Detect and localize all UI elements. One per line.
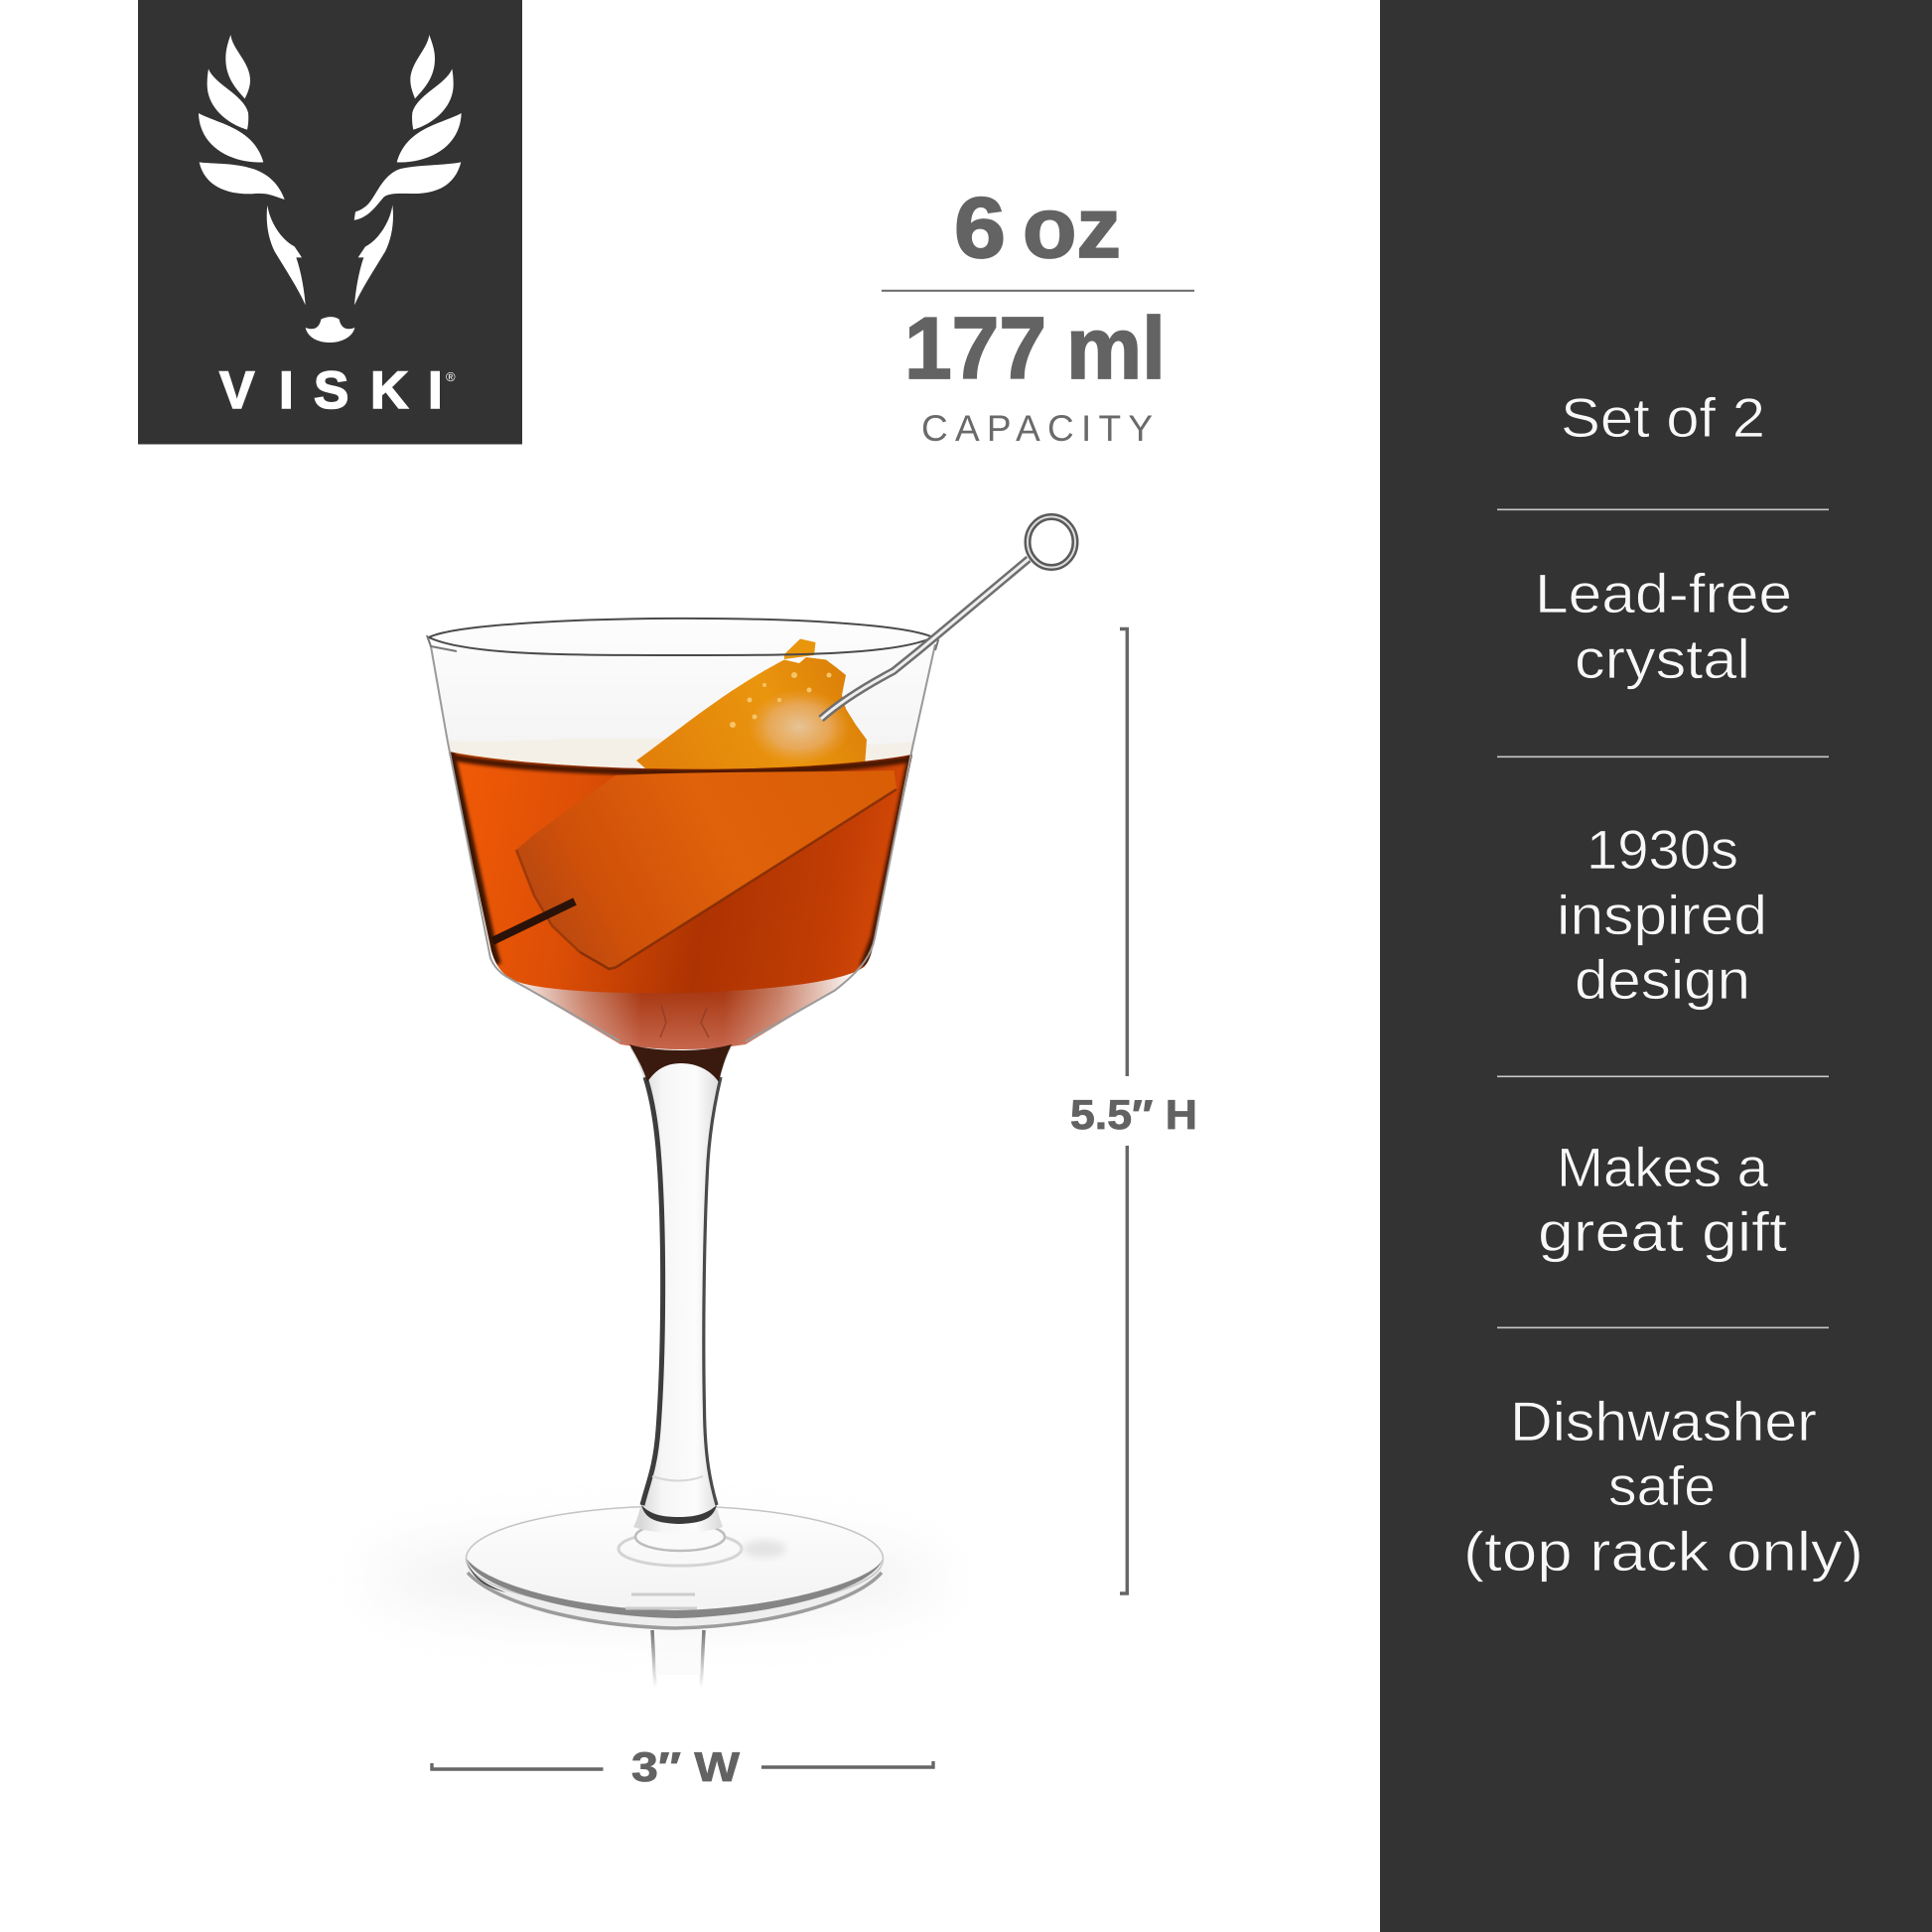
glass bowl outline [427,619,938,1041]
feature: set of 2: Set of 2 [1561,386,1765,449]
lower citrus peel [492,770,897,969]
cocktail pick inside the liquid [492,901,575,941]
capacity in ounces: 6 [954,181,1006,276]
capacity in millilitres: 177 [904,299,1046,397]
stem reflection [652,1630,704,1688]
base shadow [367,1537,943,1620]
feature: dishwasher safe [1463,1390,1863,1583]
feature: 1930s inspired design: design [1575,948,1750,1011]
feature: makes a great gift [1538,1136,1788,1263]
panel: viski logo [138,0,522,445]
upper citrus peel [636,639,867,772]
feature: 1930s inspired design [1557,818,1767,1011]
icon: stag head emblem [199,35,462,343]
meniscus [448,739,912,771]
capacity in ounces: oz [1023,181,1121,276]
liquid: cone below bowl [506,969,860,1049]
cocktail glass illustration [367,516,1075,1688]
stem junction [629,1044,732,1082]
registered mark: ® [446,369,456,384]
feature: 1930s inspired design: inspired [1557,884,1767,946]
bowl air space [427,619,937,755]
capacity in millilitres [904,299,1166,397]
feature: makes a great gift: Makes a [1557,1136,1769,1198]
feature: dishwasher safe: (top rack only) [1463,1520,1863,1583]
pick ring [1028,516,1075,568]
liquid body [449,752,912,993]
feature: lead-free crystal [1535,562,1792,690]
cocktail pick [821,516,1075,719]
feature: lead-free crystal: Lead-free [1535,562,1792,624]
feature: dishwasher safe: Dishwasher [1510,1390,1817,1452]
width dimension [432,1743,933,1790]
feature: makes a great gift: great gift [1538,1200,1788,1263]
glass foot [467,1506,884,1628]
feature: lead-free crystal: crystal [1575,627,1750,690]
capacity in millilitres: ml [1066,299,1166,397]
capacity label: CAPACITY [921,408,1153,449]
height dimension [1070,629,1197,1593]
panel: features sidebar [1380,0,1932,1932]
glass stem [629,1047,732,1533]
capacity in ounces [954,181,1121,276]
capacity block [882,181,1194,449]
width label: 3″ W [631,1743,740,1790]
feature: 1930s inspired design: 1930s [1587,818,1738,881]
height label: 5.5″ H [1070,1091,1197,1138]
logo wordmark: VISKI [219,361,443,420]
feature: dishwasher safe: safe [1608,1454,1716,1517]
